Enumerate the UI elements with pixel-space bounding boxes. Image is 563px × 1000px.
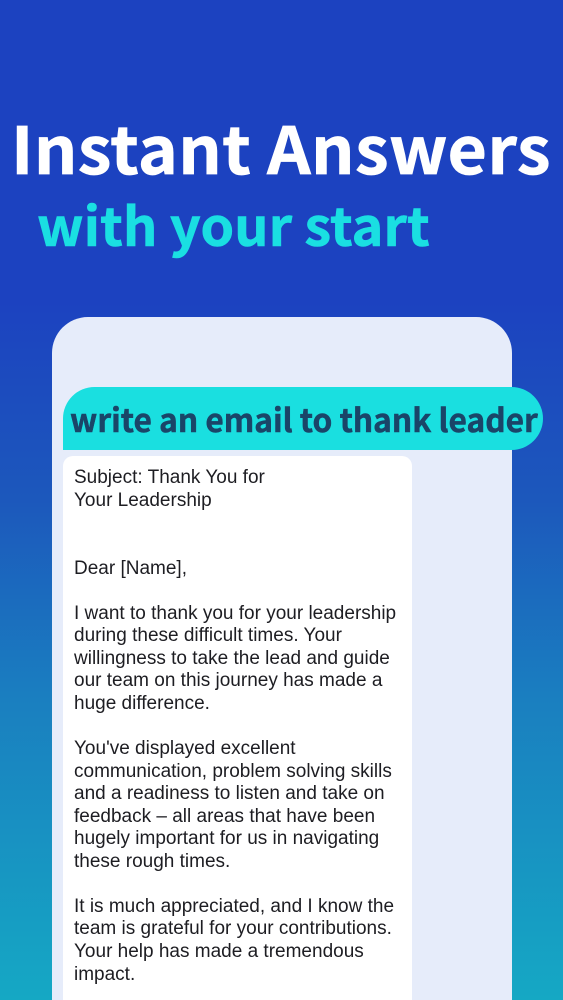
email text: hugely important for us in navigating	[74, 828, 379, 849]
email text: feedback – all areas that have been	[74, 806, 375, 827]
subtitle: with your start: with your start	[37, 186, 430, 262]
email text: during these difficult times. Your	[74, 625, 342, 646]
email text: huge difference.	[74, 693, 210, 714]
email text: You've displayed excellent	[74, 738, 296, 759]
email text: willingness to take the lead and guide	[74, 648, 390, 669]
answer card with email text	[63, 456, 412, 1000]
email text: Your Leadership	[74, 490, 212, 511]
email text: our team on this journey has made a	[74, 670, 382, 691]
email text: Subject: Thank You for	[74, 467, 265, 488]
title: Instant Answers: Instant Answers	[11, 99, 551, 193]
email text: these rough times.	[74, 851, 230, 872]
user prompt bubble	[63, 387, 543, 450]
email text: impact.	[74, 964, 135, 985]
email text: communication, problem solving skills	[74, 761, 392, 782]
prompt text: write an email to thank leader	[70, 396, 538, 442]
email text: team is grateful for your contributions.	[74, 918, 392, 939]
email text: Dear [Name],	[74, 558, 187, 579]
email text: Your help has made a tremendous	[74, 941, 364, 962]
email text: I want to thank you for your leadership	[74, 603, 396, 624]
panel: chat screen	[52, 317, 512, 1000]
email text: It is much appreciated, and I know the	[74, 896, 394, 917]
email text: and a readiness to listen and take on	[74, 783, 385, 804]
